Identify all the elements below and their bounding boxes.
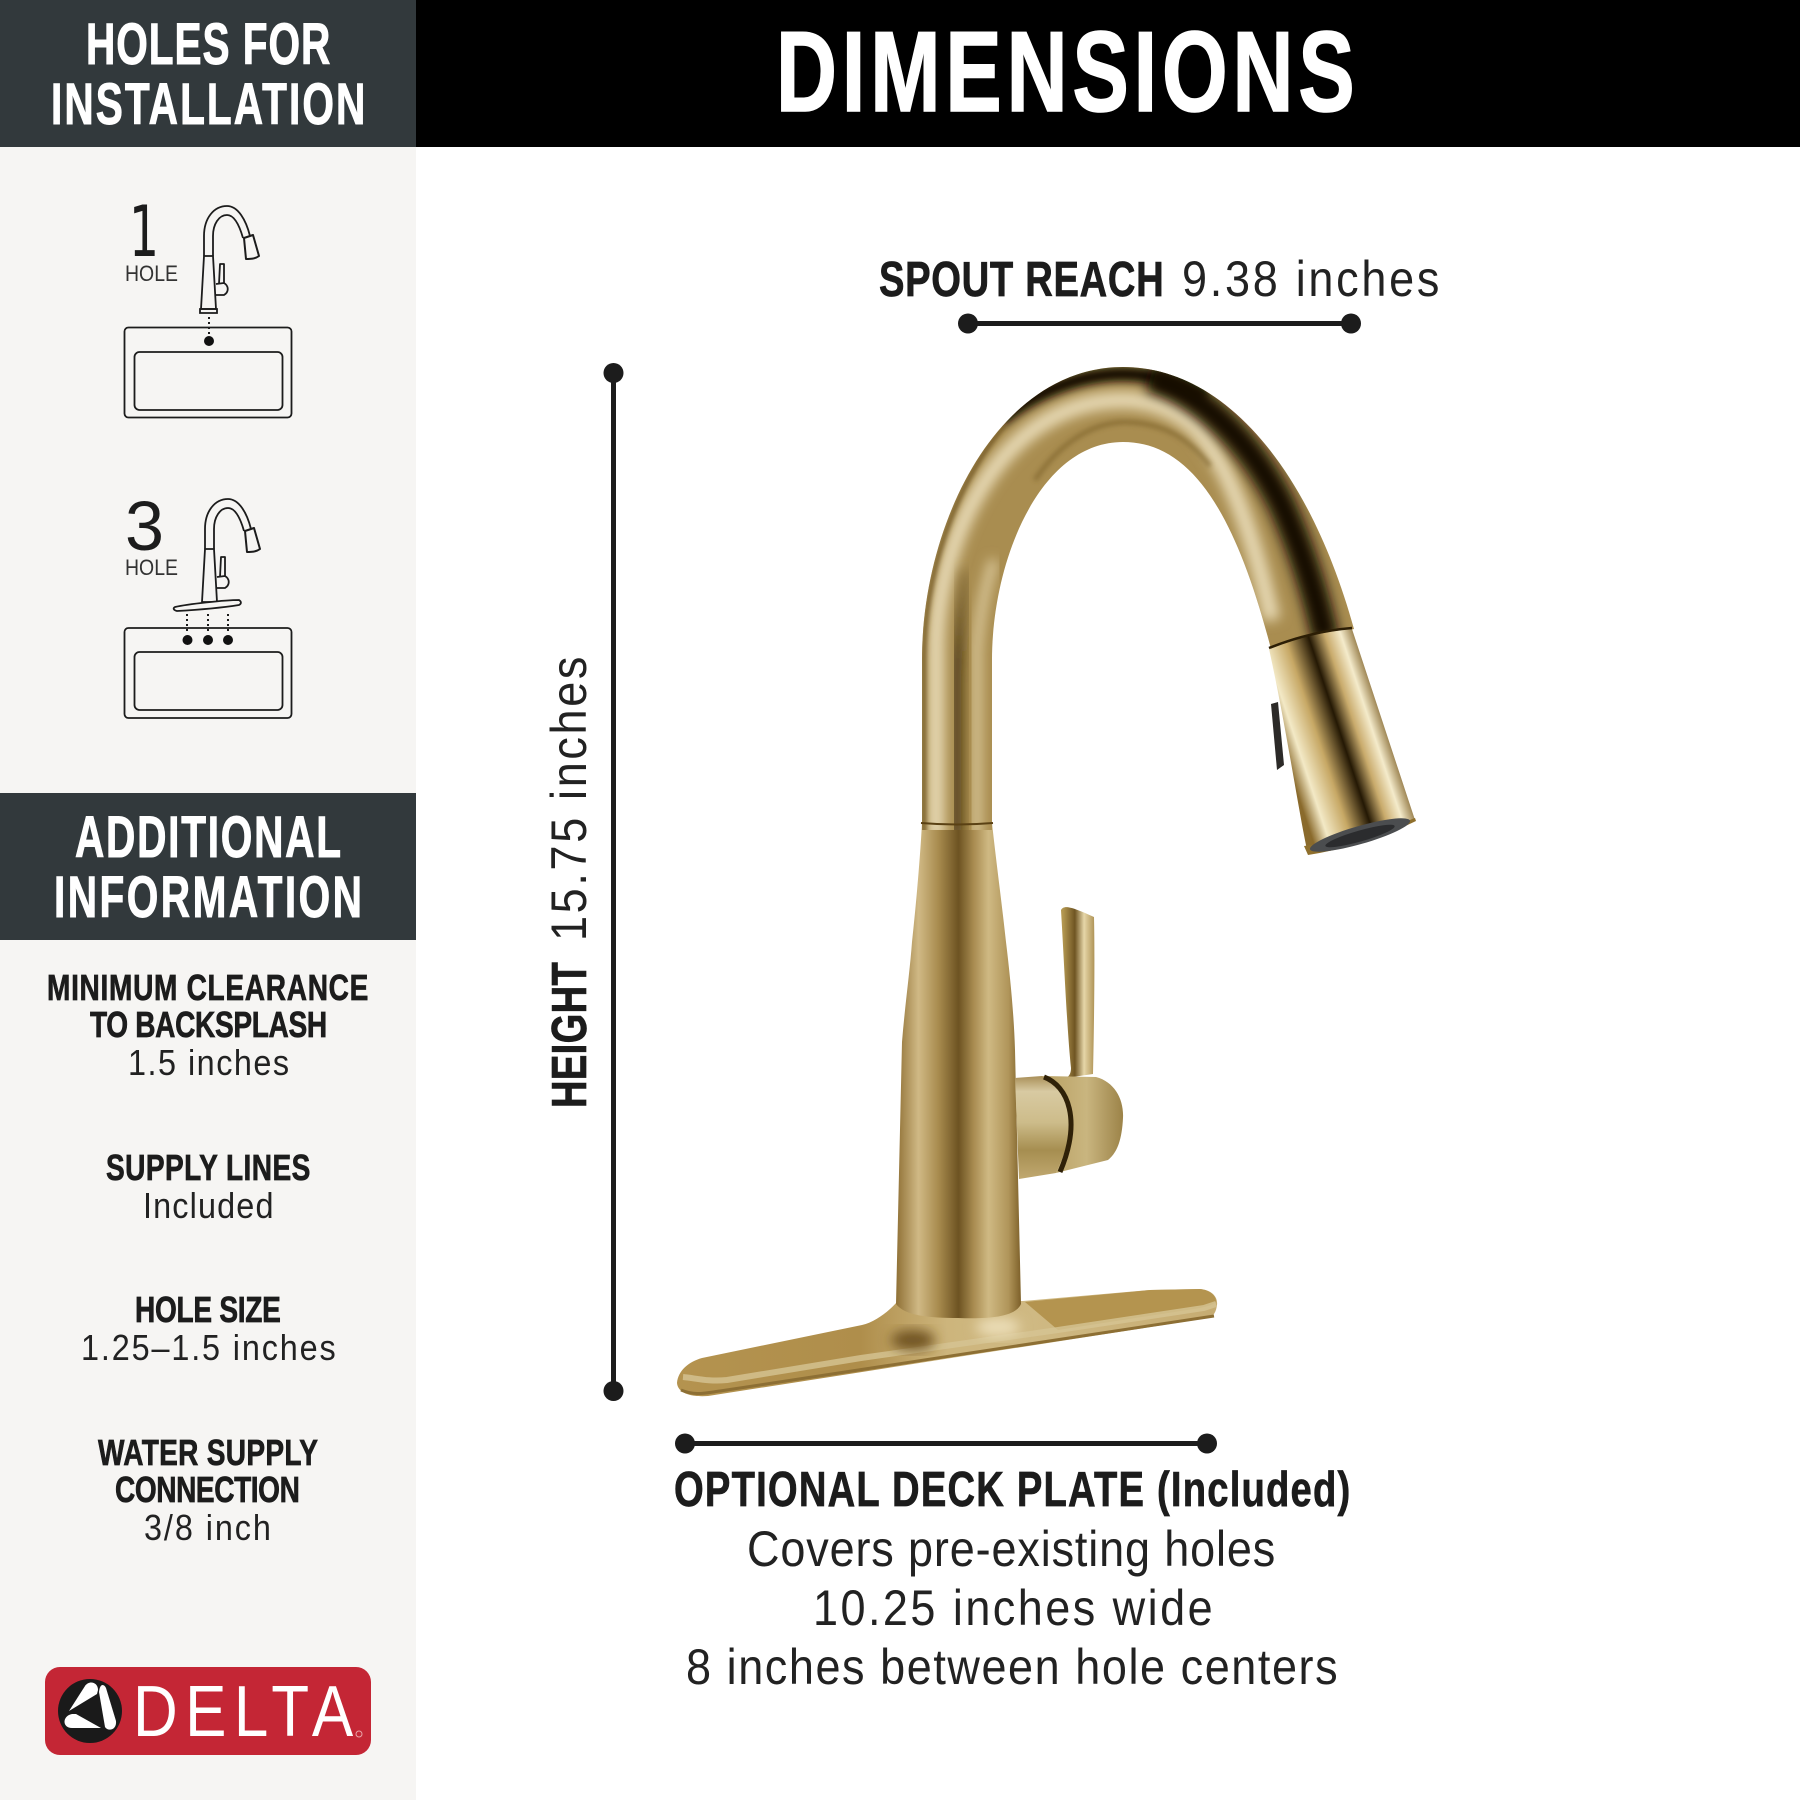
info: supply lines: SUPPLY LINES <box>106 1148 310 1188</box>
text block: optional deck plate <box>674 1463 1350 1696</box>
icon: 1 hole installation <box>124 191 292 418</box>
info: minimum clearance: MINIMUM CLEARANCE <box>47 968 368 1008</box>
info: minimum clearance <box>47 968 368 1083</box>
panel: left sidebar <box>0 0 416 1800</box>
logo: delta <box>45 1667 371 1755</box>
header: holes for installation <box>0 0 416 147</box>
icon: 1 hole installation: HOLE <box>125 261 178 286</box>
label: spout reach <box>879 252 1439 308</box>
body <box>896 823 1021 1318</box>
dimension line: spout reach <box>958 314 1361 334</box>
icon: 3 hole installation: HOLE <box>125 555 178 580</box>
text block: optional deck plate: Covers pre-existing holes <box>747 1522 1275 1578</box>
info: water supply connection: 3/8 inch <box>144 1508 271 1548</box>
icon: 1 hole installation: 1 <box>129 191 159 273</box>
faucet photo <box>677 350 1416 1396</box>
header: holes for installation: HOLES FOR <box>86 12 330 77</box>
spray head <box>1269 629 1415 854</box>
trigger <box>1271 702 1284 770</box>
info: water supply connection <box>98 1433 318 1548</box>
neck collar line <box>921 823 993 824</box>
handle lever <box>1061 907 1094 1078</box>
header: additional information: INFORMATION <box>54 865 362 930</box>
dimension line: height <box>604 363 624 1401</box>
label: height <box>542 657 598 1108</box>
info: supply lines: Included <box>143 1186 274 1226</box>
header: additional information <box>0 793 416 940</box>
info: hole size <box>81 1290 336 1368</box>
nozzle <box>1304 812 1416 858</box>
handle knob <box>1015 1076 1123 1179</box>
text block: optional deck plate: OPTIONAL DECK PLATE (Included) <box>674 1463 1350 1517</box>
deck plate <box>677 1289 1217 1396</box>
label: spout reach: SPOUT REACH <box>879 253 1164 307</box>
label: height: 15.75 inches <box>542 657 598 941</box>
info: water supply connection: WATER SUPPLY <box>98 1433 318 1473</box>
label: height: HEIGHT <box>543 962 597 1108</box>
info: hole size: 1.25–1.5 inches <box>81 1328 336 1368</box>
info: minimum clearance: 1.5 inches <box>128 1043 289 1083</box>
info: minimum clearance: TO BACKSPLASH <box>90 1005 327 1045</box>
text block: optional deck plate: 8 inches between hole centers <box>686 1640 1338 1696</box>
text block: optional deck plate: 10.25 inches wide <box>813 1581 1213 1637</box>
icon: 3 hole installation: 3 <box>125 487 164 565</box>
info: water supply connection: CONNECTION <box>115 1470 300 1510</box>
info: supply lines <box>106 1148 310 1226</box>
logo: delta: DELTA <box>133 1672 353 1752</box>
spout arch <box>922 367 1354 830</box>
icon: 3 hole installation <box>124 487 292 718</box>
dimension line: deck plate <box>675 1434 1217 1454</box>
title banner: dimensions <box>416 0 1800 147</box>
collar seam <box>1269 628 1352 648</box>
title banner: dimensions: DIMENSIONS <box>776 9 1355 136</box>
header: holes for installation: INSTALLATION <box>51 72 365 137</box>
info: hole size: HOLE SIZE <box>135 1290 281 1330</box>
label: spout reach: 9.38 inches <box>1182 252 1439 308</box>
header: additional information: ADDITIONAL <box>75 805 341 870</box>
